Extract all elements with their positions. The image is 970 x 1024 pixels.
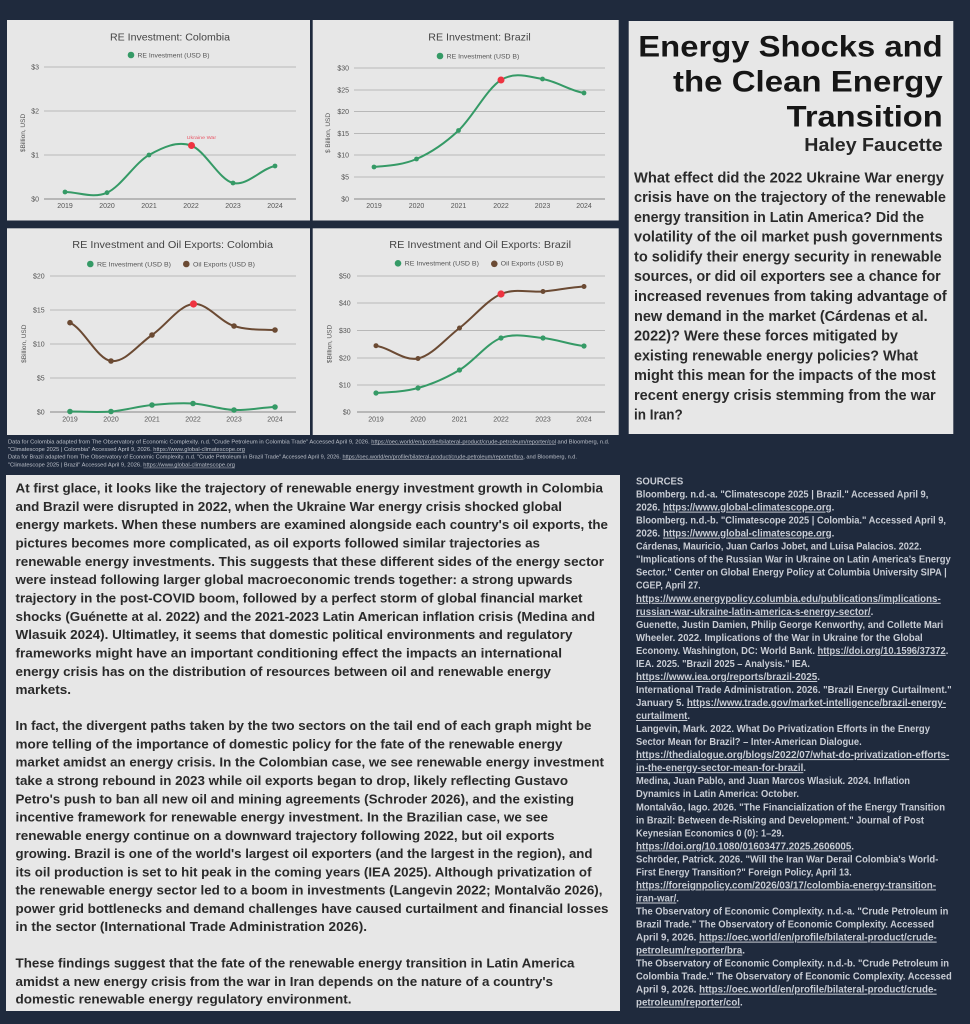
- y axis labels: $10: [33, 342, 45, 348]
- paragraph 1: pictures becomes more complicated, as oil exports followed similar trajectories as: [16, 536, 540, 550]
- data source footnote: "Climatescope 2025 | Colombia" Accessed April 9, 2026. https://www.global-climatescope.org: [8, 447, 245, 453]
- paragraph 1: and Brazil were disrupted in 2022, when the Ukraine War energy crisis shocked global: [16, 499, 562, 514]
- x axis labels: 2023: [535, 203, 550, 210]
- paragraph 3: These findings suggest that the fate of the renewable energy transition in Latin America: [16, 956, 575, 970]
- sources list: International Trade Administration. 2026. "Brazil Energy Curtailment.": [636, 685, 952, 696]
- panel: line chart RE Investment Brazil: [313, 20, 619, 220]
- y axis labels: $2: [31, 108, 39, 116]
- legend: RE Investment (USD B): [97, 261, 171, 268]
- paragraph 3: [16, 956, 575, 1006]
- marker: Ukraine War: Ukraine War: [187, 135, 217, 140]
- RE investment line: [63, 144, 277, 195]
- y axis labels: [337, 66, 349, 204]
- x axis labels: 2020: [409, 203, 424, 210]
- research question text: might this mean for the impacts of the most: [634, 368, 936, 384]
- sources heading: SOURCES: [636, 476, 684, 488]
- paragraph 1: At first glace, it looks like the trajectory of renewable energy investment growth in Colombia: [16, 480, 604, 496]
- research question text: sources, or did oil exporters see a chance for: [634, 269, 941, 285]
- x axis labels: [57, 203, 283, 210]
- legend: [395, 260, 563, 268]
- title: [638, 31, 943, 134]
- title: Energy Shocks and: [638, 31, 943, 64]
- author: Haley Faucette: [804, 135, 943, 155]
- legend: [87, 261, 255, 268]
- sources list: https://thedialogue.org/blogs/2022/07/what-do-privatization-efforts-: [636, 750, 949, 761]
- x axis labels: 2019: [366, 203, 382, 210]
- sources list: Dynamics in Latin America: October.: [636, 789, 799, 800]
- sources list: 2026. https://www.global-climatescope.org.: [636, 529, 835, 540]
- x axis labels: 2022: [185, 416, 201, 424]
- y axis labels: $30: [339, 328, 351, 335]
- legend: RE Investment: RE Investment (USD B): [138, 52, 210, 60]
- paragraph 2: incentive framework for renewable energy investment. In the Brazilian case, we see: [16, 810, 548, 824]
- x axis labels: 2021: [141, 203, 157, 210]
- sources list: Schröder, Patrick. 2026. "Will the Iran War Derail Colombia's World-: [636, 854, 938, 865]
- sources list: "Implications of the Russian War in Ukraine on Latin America's Energy: [636, 555, 951, 566]
- y axis labels: $15: [33, 308, 45, 314]
- y axis title: $Billion, USD: [21, 324, 28, 363]
- y axis labels: $10: [339, 382, 351, 390]
- x axis labels: 2023: [535, 416, 551, 424]
- paragraph 2: take a strong rebound in 2023 while oil exports began to drop, likely reflecting Gustavo: [16, 773, 568, 788]
- sources list: [636, 476, 952, 1009]
- sources list: The Observatory of Economic Complexity. n.d.-b. "Crude Petroleum in: [636, 959, 949, 970]
- y axis labels: $0: [31, 196, 39, 204]
- paragraph 2: the renewable energy sector led to a boom in investments (Langevin 2022; Montalvão 2026),: [16, 883, 602, 898]
- y axis title: $Billion, USD: [326, 325, 334, 363]
- x axis labels: 2022: [493, 203, 509, 210]
- sources list: in-the-energy-sector-mean-for-brazil.: [636, 763, 806, 774]
- sources list: https://foreignpolicy.com/2026/03/17/colombia-energy-transition-: [636, 880, 936, 891]
- panel: line chart RE Investment and Oil Exports Colombia: [7, 228, 310, 435]
- y axis labels: $20: [33, 274, 45, 280]
- research question text: crisis have on the trajectory of the renewable: [634, 190, 946, 206]
- paragraph 1: frameworks might have an important conditioning effect the impacts an international: [16, 646, 562, 660]
- marker: 2022: [497, 290, 505, 298]
- sources list: Wheeler. 2022. Implications of the War in Ukraine for the Global: [636, 633, 923, 644]
- paragraph 2: its oil production is set to hit peak in the coming years (IEA 2025). Although privatization of: [16, 864, 592, 879]
- x axis labels: [366, 203, 592, 210]
- data source footnote: "Climatescope 2025 | Brazil" Accessed April 9, 2026. https://www.global-climatescope.org: [8, 463, 235, 469]
- legend: Oil Exports (USD B): [501, 261, 563, 268]
- y axis labels: $0: [37, 410, 45, 416]
- paragraph 1: markets.: [16, 682, 71, 697]
- y axis title: $Billion, USD: [20, 114, 27, 152]
- data source footnote: Data for Brazil adapted from The Observatory of Economic Complexity. n.d. "Crude Petroleum in Brazil Trade" Accessed April 9, 2026. https://oec.world/en/profile/bilateral-product/crude-petroleum/reporter/bra , and Bloomberg, n.d.: [8, 454, 577, 460]
- x axis labels: [368, 416, 592, 424]
- sources list: Colombia Trade." The Observatory of Economic Complexity. Accessed: [636, 972, 952, 983]
- research question text: recent energy crisis stemming from the war: [634, 388, 936, 404]
- x axis labels: 2021: [452, 416, 467, 424]
- research question text: energy transition in Latin America? Did the: [634, 210, 924, 226]
- y axis labels: $0: [343, 410, 351, 416]
- research question text: in Iran?: [634, 408, 683, 424]
- y axis labels: $20: [339, 356, 351, 362]
- chart title: RE Investment and Oil Exports: Brazil: [389, 239, 571, 251]
- sources list: petroleum/reporter/col.: [636, 998, 743, 1009]
- panel: analysis text: [6, 475, 620, 1011]
- sources list: 2026. https://www.global-climatescope.org.: [636, 503, 835, 514]
- y axis labels: $1: [31, 152, 39, 160]
- research question text: 2022)? Were these forces mitigated by: [634, 328, 898, 344]
- x axis labels: [62, 416, 283, 424]
- sources list: petroleum/reporter/bra.: [636, 946, 745, 957]
- x axis labels: 2023: [226, 416, 242, 424]
- sources list: https://www.iea.org/reports/brazil-2025.: [636, 672, 820, 683]
- legend: Oil Exports (USD B): [193, 261, 255, 268]
- paragraph 1: shocks (Guénette at al. 2022) and the 2021-2023 Latin American inflation crisis (Medina and: [16, 609, 595, 624]
- RE investment line: [372, 75, 586, 169]
- paragraph 2: [16, 718, 608, 934]
- sources list: Sector Mean for Brazil? – Inter-American Dialogue.: [636, 737, 862, 748]
- paragraph 2: more telling of the importance of domestic policy for the fate of the renewable energy: [16, 736, 563, 752]
- sources list: April 9, 2026. https://oec.world/en/profile/bilateral-product/crude-: [636, 933, 937, 944]
- chart title: RE Investment Colombia: RE Investment: Colombia: [110, 32, 230, 44]
- x axis labels: 2022: [493, 416, 509, 424]
- sources list: Keynesian Economics 0 (0): 1–29.: [636, 828, 784, 839]
- y axis title: $ Billion, USD: [325, 113, 332, 153]
- sources list: April 9, 2026. https://oec.world/en/profile/bilateral-product/crude-: [636, 985, 937, 996]
- x axis labels: 2020: [103, 416, 119, 424]
- x axis labels: 2022: [183, 203, 199, 210]
- y axis labels: [339, 274, 351, 416]
- paragraph 2: In fact, the divergent paths taken by the two sectors on the tail end of each graph might be: [16, 718, 592, 733]
- paragraph 2: renewable energy continue on a downward trajectory following 2022, but oil exports: [16, 828, 554, 843]
- sources list: in Brazil: Between de-Risking and Development." Journal of Post: [636, 815, 925, 826]
- research question text: existing renewable energy policies? What: [634, 348, 918, 364]
- sources list: Langevin, Mark. 2022. What Do Privatization Efforts in the Energy: [636, 724, 930, 735]
- paragraph 2: growing. Brazil is one of the world's largest oil exporters (and the largest in the region), and: [16, 846, 593, 861]
- sources list: Economy. Washington, DC: World Bank. https://doi.org/10.1596/37372.: [636, 646, 949, 657]
- data source footnote: [8, 440, 610, 469]
- paragraph 1: trajectory in the post-COVID boom, followed by a perfect storm of global financial market: [16, 590, 583, 606]
- y axis labels: $5: [37, 376, 45, 382]
- marker: 2022: [190, 300, 197, 308]
- data source footnote: Data for Colombia adapted from The Observatory of Economic Complexity. n.d. "Crude Petroleum in Colombia Trade" Accessed April 9, 2026. https://oec.world/en/profile/bilateral-product/crude-petroleum/reporter/col and Bloomberg, n.d.: [8, 440, 610, 446]
- research question text: [634, 170, 947, 424]
- chart title: RE Investment Brazil: RE Investment: Brazil: [428, 32, 531, 44]
- y axis labels: $5: [341, 174, 349, 182]
- RE investment line: [67, 401, 278, 414]
- sources list: https://www.energypolicy.columbia.edu/publications/implications-: [636, 594, 941, 605]
- title: Transition: [787, 101, 943, 134]
- paragraph 1: Wlasuik 2024). Ultimatley, it seems that domestic political environments and regulatory: [16, 627, 573, 642]
- paragraph 2: Petro's push to ban all new oil and mining agreements (Schroder 2026), and the existing: [16, 791, 574, 806]
- x axis labels: 2019: [368, 416, 384, 424]
- sources list: The Observatory of Economic Complexity. n.d.-a. "Crude Petroleum in: [636, 906, 948, 918]
- y axis labels: $15: [337, 131, 349, 138]
- legend: RE Investment (USD B): [405, 261, 479, 268]
- paragraph 3: amidst a new energy crisis from the war in Iran depends on the nature of a country's: [16, 974, 553, 989]
- sources list: Medina, Juan Pablo, and Juan Marcos Wlasiuk. 2024. Inflation: [636, 776, 910, 787]
- sources list: Guenette, Justin Damien, Philip George Kenworthy, and Collette Mari: [636, 620, 943, 631]
- marker: Ukraine War: [187, 135, 217, 149]
- y axis labels: $0: [341, 196, 349, 204]
- paragraph 2: market amidst an energy crisis. In the Colombian case, we see renewable energy investment: [16, 755, 605, 770]
- x axis labels: 2023: [225, 203, 241, 210]
- sources list: https://doi.org/10.1080/01603477.2025.2606005.: [636, 841, 854, 852]
- research question text: to solidify their energy security in renewable: [634, 249, 942, 265]
- sources list: Bloomberg. n.d.-b. "Climatescope 2025 | Colombia." Accessed April 9,: [636, 516, 946, 527]
- research question text: volatility of the oil market push governments: [634, 230, 943, 246]
- paragraph 1: renewable energy investments. This suggests that these different sides of the energy sector: [16, 554, 604, 569]
- sources list: iran-war/.: [636, 894, 679, 904]
- sources list: Sector." Center on Global Energy Policy at Columbia University SIPA |: [636, 568, 947, 579]
- x axis labels: 2024: [576, 416, 592, 424]
- x axis labels: 2024: [267, 416, 283, 424]
- sources list: Bloomberg. n.d.-a. "Climatescope 2025 | Brazil." Accessed April 9,: [636, 490, 928, 500]
- title: the Clean Energy: [673, 66, 943, 99]
- sources list: russian-war-ukraine-latin-america-s-energy-sector/.: [636, 607, 874, 618]
- x axis labels: 2020: [410, 416, 426, 424]
- paragraph 1: energy crisis has on the distribution of resources between oil and renewable energy: [16, 664, 552, 679]
- x axis labels: 2019: [57, 203, 73, 210]
- paragraph 1: energy markets. When these numbers are examined alongside each country's oil exports, the: [16, 517, 608, 532]
- panel: line chart RE Investment Colombia: [7, 20, 310, 220]
- RE investment line: [373, 335, 587, 396]
- y axis labels: $50: [339, 274, 351, 280]
- paragraph 2: power grid bottlenecks and demand challenges have caused curtailment and financial losses: [16, 901, 608, 916]
- y axis labels: [33, 274, 45, 416]
- y axis labels: $10: [337, 152, 349, 160]
- research question text: new demand in the market (Cárdenas et al.: [634, 309, 928, 325]
- sources list: Brazil Trade." The Observatory of Economic Complexity. Accessed: [636, 920, 934, 930]
- y axis labels: $25: [337, 88, 349, 94]
- sources list: Cárdenas, Mauricio, Juan Carlos Jobet, and Luisa Palacios. 2022.: [636, 542, 922, 553]
- oil exports line: [374, 284, 586, 361]
- panel: title and research question: [629, 21, 953, 434]
- paragraph 2: in the sector (International Trade Administration 2026).: [16, 919, 367, 934]
- x axis labels: 2024: [267, 203, 283, 210]
- research question text: What effect did the 2022 Ukraine War energy: [634, 170, 944, 186]
- y axis labels: [31, 64, 39, 204]
- x axis labels: 2021: [144, 416, 160, 424]
- sources list: curtailment.: [636, 711, 690, 722]
- paragraph 1: [14, 480, 608, 697]
- y axis labels: $3: [31, 64, 39, 72]
- legend: RE Investment: RE Investment (USD B): [447, 53, 519, 60]
- sources list: IEA. 2025. "Brazil 2025 – Analysis." IEA.: [636, 659, 810, 670]
- research question text: increased revenues from taking advantage of: [634, 289, 947, 305]
- panel: line chart RE Investment and Oil Exports Brazil: [313, 228, 619, 435]
- sources list: First Energy Transition?" Foreign Policy, April 13.: [636, 867, 852, 878]
- y axis labels: $40: [339, 300, 351, 308]
- x axis labels: 2021: [451, 203, 466, 210]
- y axis labels: $20: [337, 109, 349, 116]
- sources list: CGEP, April 27.: [636, 581, 701, 592]
- x axis labels: 2020: [99, 203, 115, 210]
- sources list: Montalvão, Iago. 2026. "The Financialization of the Energy Transition: [636, 802, 945, 813]
- oil exports line: [67, 304, 278, 364]
- x axis labels: 2024: [576, 203, 592, 210]
- x axis labels: 2019: [62, 416, 78, 424]
- chart title: RE Investment and Oil Exports: Colombia: [72, 239, 273, 251]
- paragraph 3: domestic renewable energy regulatory environment.: [16, 992, 352, 1006]
- sources list: January 5. https://www.trade.gov/market-intelligence/brazil-energy-: [636, 698, 946, 709]
- paragraph 1: were instead following larger global macroeconomic trends together: a strong upwards: [14, 572, 573, 587]
- marker: 2022: [498, 76, 504, 84]
- y axis labels: $30: [337, 66, 349, 72]
